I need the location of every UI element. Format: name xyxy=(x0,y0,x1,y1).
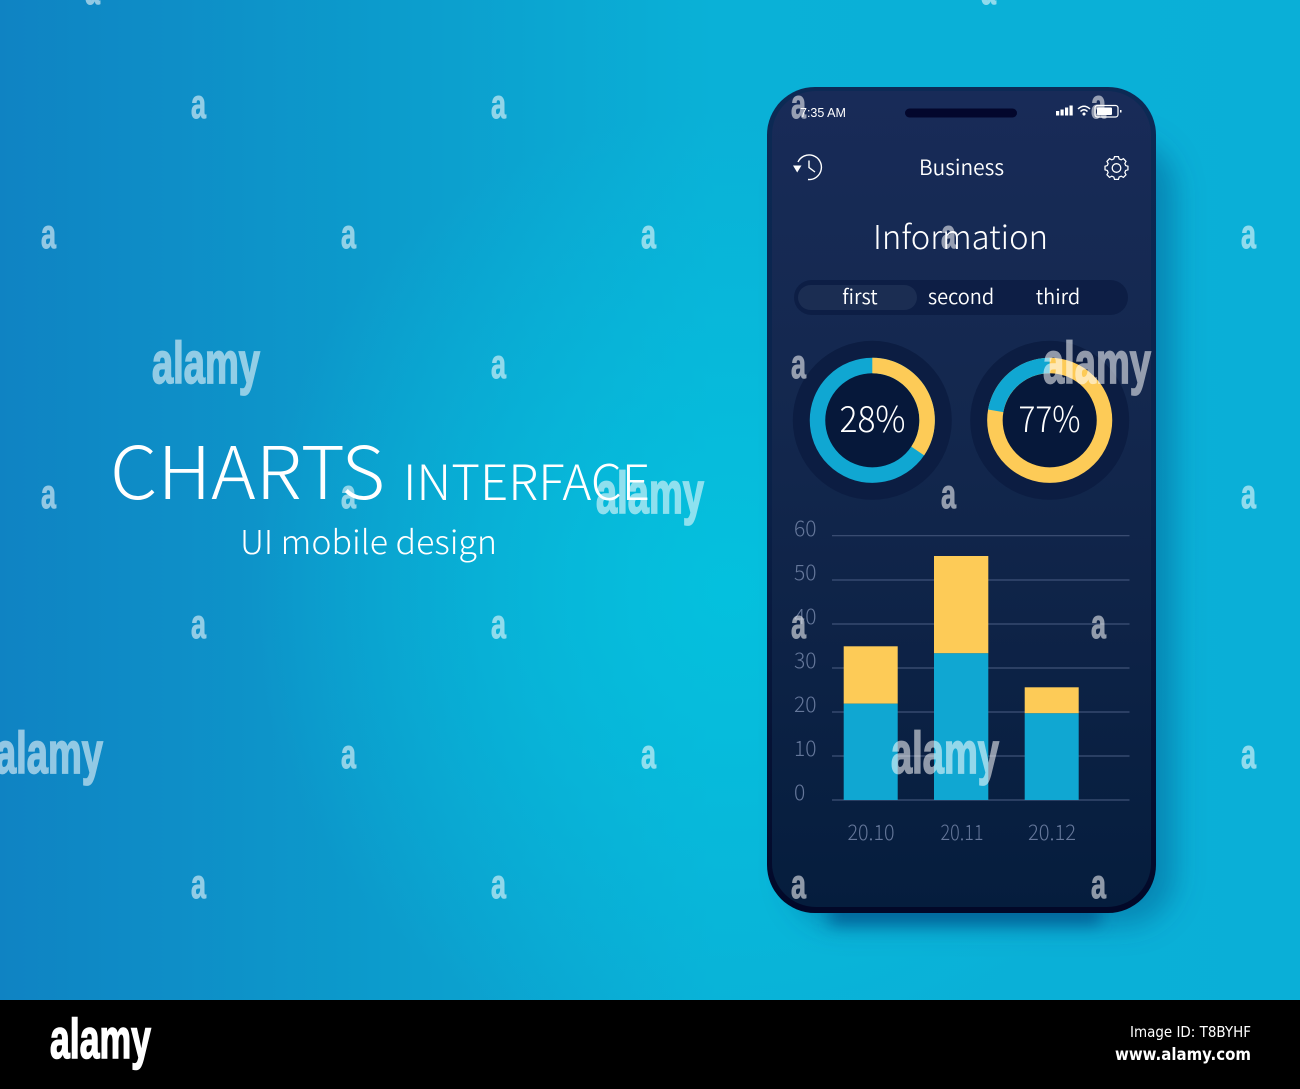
watermarks: a xyxy=(191,81,207,127)
tab label: first: first xyxy=(842,281,878,310)
watermarks: a xyxy=(491,601,507,647)
donut chart: 28%: 28% xyxy=(840,391,906,443)
watermarks: alamy xyxy=(1043,331,1151,396)
tab label: third: third xyxy=(1036,281,1080,310)
phone screen xyxy=(772,91,1151,907)
watermarks: a xyxy=(191,601,207,647)
tab bar xyxy=(794,280,1128,315)
y axis labels: 30 xyxy=(794,645,816,675)
donut chart: 77%: 77% xyxy=(1018,391,1080,443)
watermarks: a xyxy=(491,81,507,127)
footer bar xyxy=(0,1000,1300,1089)
y axis labels xyxy=(794,513,816,807)
y axis labels: 40 xyxy=(794,601,816,631)
active tab pill xyxy=(798,285,917,310)
watermarks: a xyxy=(641,211,657,257)
watermarks: a xyxy=(1241,211,1257,257)
x axis labels: 20.10 xyxy=(848,817,894,847)
heading: Business: Business xyxy=(919,152,1004,182)
watermarks: a xyxy=(1091,81,1107,127)
y axis labels: 0 xyxy=(794,777,805,807)
bar: 20.10 xyxy=(844,646,898,800)
y axis labels: 10 xyxy=(794,733,816,763)
x axis labels xyxy=(848,817,1076,847)
watermarks: a xyxy=(191,861,207,907)
donut chart: 28% xyxy=(793,341,952,500)
title word: INTERFACE: INTERFACE xyxy=(403,444,650,515)
watermarks: a xyxy=(1091,601,1107,647)
bar: 20.11 xyxy=(934,556,988,800)
x axis labels: 20.12 xyxy=(1028,817,1076,847)
phone shadow xyxy=(790,140,1175,925)
footer logo: alamy xyxy=(50,1007,151,1070)
bar: 20.12 xyxy=(1025,687,1079,800)
image id: Image ID: T8BYHF xyxy=(1130,1023,1251,1041)
phone speaker notch xyxy=(905,108,1017,118)
status icon: battery xyxy=(1095,106,1122,117)
headline: charts interface xyxy=(110,415,650,564)
watermarks: a xyxy=(641,731,657,777)
y axis labels: 60 xyxy=(794,513,816,543)
tab label: second: second xyxy=(928,281,994,310)
watermarks: a xyxy=(341,211,357,257)
stacked bar chart xyxy=(794,513,1130,847)
status icon: wifi xyxy=(1078,106,1090,115)
website: www.alamy.com xyxy=(1115,1045,1251,1065)
status bar time: 7:35 AM xyxy=(800,106,846,120)
subtitle: UI mobile design xyxy=(240,516,497,564)
title word: CHARTS: CHARTS xyxy=(110,415,385,521)
watermarks: a xyxy=(1241,731,1257,777)
y axis labels: 20 xyxy=(794,689,816,719)
watermarks: alamy xyxy=(596,461,704,526)
watermarks: a xyxy=(41,211,57,257)
watermarks: a xyxy=(791,861,807,907)
watermarks: a xyxy=(791,341,807,387)
status icon: signal xyxy=(1056,106,1073,116)
watermarks: a xyxy=(1091,861,1107,907)
x axis labels: 20.11 xyxy=(940,817,984,847)
watermarks: a xyxy=(1241,471,1257,517)
watermarks: alamy xyxy=(891,721,999,786)
donut chart: 77% xyxy=(970,341,1129,500)
icon: history clock xyxy=(793,155,821,180)
watermarks: a xyxy=(791,601,807,647)
phone frame xyxy=(767,87,1156,913)
watermarks: a xyxy=(341,471,357,517)
watermarks: a xyxy=(41,471,57,517)
watermarks: alamy xyxy=(152,331,260,396)
icon: settings gear xyxy=(1105,157,1128,179)
heading: Information: Information xyxy=(873,211,1048,259)
watermarks: a xyxy=(941,471,957,517)
watermarks: a xyxy=(791,81,807,127)
watermarks: a xyxy=(491,341,507,387)
watermarks: a xyxy=(491,861,507,907)
watermarks: a xyxy=(941,211,957,257)
watermarks: a xyxy=(341,731,357,777)
y axis labels: 50 xyxy=(794,557,816,587)
